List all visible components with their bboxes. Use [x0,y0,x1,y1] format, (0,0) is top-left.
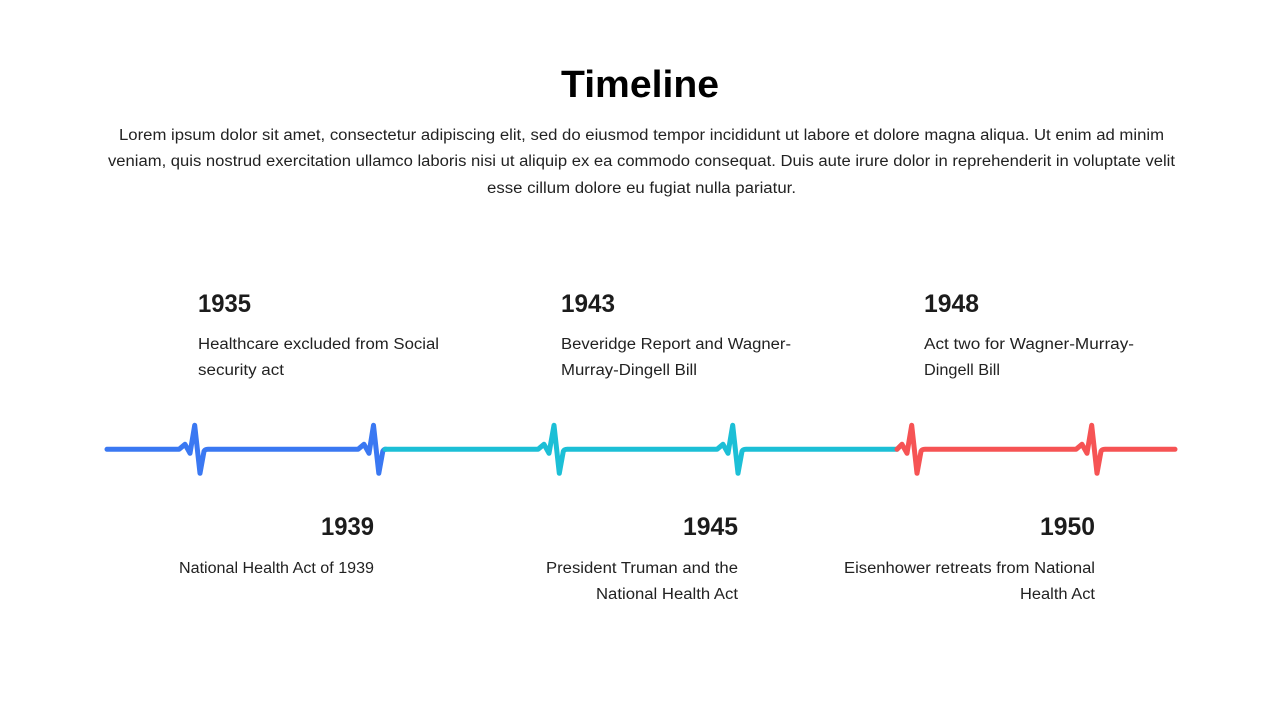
title: Timeline [561,64,719,106]
milestone 1950: Eisenhower retreats from National [844,560,1095,577]
milestone 1939: 1939 [321,513,374,541]
milestone 1948: 1948 [924,290,979,318]
milestone 1950 [844,513,1096,603]
milestone 1935: 1935 [198,290,251,318]
intro paragraph: Lorem ipsum dolor sit amet, consectetur adipiscing elit, sed do eiusmod tempor incididunt ut labore et dolore magna aliqua. Ut enim ad minim [119,127,1164,144]
heartbeat timeline: teal segment [385,425,897,473]
milestone 1945: President Truman and the [546,560,738,577]
intro paragraph [108,127,1176,197]
milestone 1945: National Health Act [596,586,739,603]
milestone 1943: Beveridge Report and Wagner- [561,336,791,353]
milestone 1948: Dingell Bill [924,362,1000,379]
heartbeat timeline: blue segment [107,425,386,473]
milestone 1950: Health Act [1020,586,1096,603]
milestone 1935 [198,290,439,379]
milestone 1943: 1943 [561,290,615,318]
milestone 1935: Healthcare excluded from Social [198,336,439,353]
milestone 1945 [546,513,739,603]
milestone 1948: Act two for Wagner-Murray- [924,336,1134,353]
milestone 1943 [561,290,791,379]
intro paragraph: veniam, quis nostrud exercitation ullamco laboris nisi ut aliquip ex ea commodo consequat. Duis aute irure dolor in reprehenderit in voluptate velit [108,153,1176,170]
milestone 1948 [924,290,1134,379]
milestone 1939 [179,513,374,577]
intro paragraph: esse cillum dolore eu fugiat nulla pariatur. [487,180,796,197]
milestone 1943: Murray-Dingell Bill [561,362,697,379]
heartbeat timeline: red segment [897,425,1175,473]
milestone 1939: National Health Act of 1939 [179,560,374,577]
milestone 1950: 1950 [1040,513,1095,541]
milestone 1935: security act [198,362,285,379]
milestone 1945: 1945 [683,513,738,541]
